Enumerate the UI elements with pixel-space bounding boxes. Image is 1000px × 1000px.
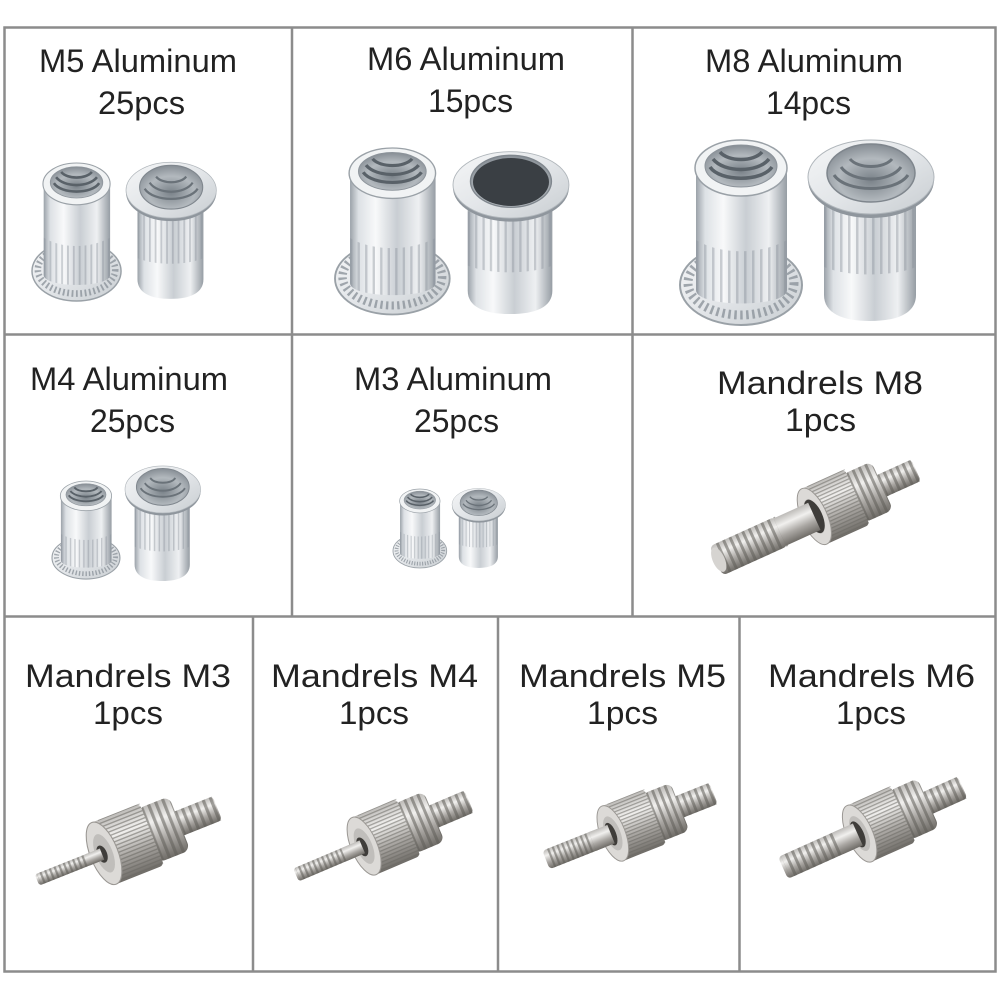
heading: M3 Aluminum 25pcs — [354, 361, 552, 439]
heading: M8 Aluminum 14pcs: M8 Aluminum — [705, 43, 903, 79]
icon: M5 mandrel — [535, 766, 724, 887]
heading: Mandrels M6 1pcs: Mandrels M6 — [768, 658, 975, 694]
heading: Mandrels M3 1pcs: Mandrels M3 — [25, 658, 231, 694]
icon: M8 rivet nuts — [680, 140, 934, 325]
heading: Mandrels M6 1pcs — [768, 658, 975, 731]
heading: Mandrels M8 1pcs: Mandrels M8 — [717, 365, 923, 401]
heading: M8 Aluminum 14pcs — [705, 43, 903, 121]
heading: M4 Aluminum 25pcs: M4 Aluminum — [30, 361, 228, 397]
panel: Mandrels M6 — [768, 658, 975, 896]
heading: Mandrels M3 1pcs — [25, 658, 231, 731]
heading: Mandrels M4 1pcs: Mandrels M4 — [271, 658, 478, 694]
heading: M8 Aluminum 14pcs: 14pcs — [766, 85, 851, 121]
heading: M3 Aluminum 25pcs: M3 Aluminum — [354, 361, 552, 397]
heading: M4 Aluminum 25pcs — [30, 361, 228, 439]
panel: Mandrels M8 — [701, 365, 929, 590]
heading: M6 Aluminum 15pcs: M6 Aluminum — [367, 41, 565, 77]
icon: M6 mandrel — [770, 759, 975, 896]
panel: M6 Aluminum — [335, 41, 569, 314]
panel: Mandrels M3 — [25, 658, 231, 911]
heading: M5 Aluminum 25pcs: M5 Aluminum — [39, 43, 237, 79]
heading: M6 Aluminum 15pcs — [367, 41, 565, 119]
heading: Mandrels M5 1pcs: 1pcs — [587, 695, 658, 731]
heading: M4 Aluminum 25pcs: 25pcs — [90, 403, 175, 439]
panel: M3 Aluminum — [354, 361, 552, 568]
icon: M4 rivet nuts — [52, 466, 201, 581]
heading: M5 Aluminum 25pcs — [39, 43, 237, 121]
panel: Mandrels M4 — [271, 658, 481, 904]
icon: M8 mandrel — [701, 443, 929, 590]
icon: M5 rivet nuts — [32, 162, 216, 301]
panel: M5 Aluminum — [32, 43, 237, 301]
panel: M4 Aluminum — [30, 361, 228, 581]
panel: Mandrels M5 — [519, 658, 726, 887]
heading: Mandrels M4 1pcs — [271, 658, 478, 731]
heading: Mandrels M5 1pcs: Mandrels M5 — [519, 658, 726, 694]
icon: M4 mandrel — [284, 773, 481, 904]
icon: M3 mandrel — [25, 777, 230, 911]
heading: Mandrels M4 1pcs: 1pcs — [339, 695, 409, 731]
heading: M5 Aluminum 25pcs: 25pcs — [98, 85, 185, 121]
heading: M3 Aluminum 25pcs: 25pcs — [414, 403, 499, 439]
heading: M6 Aluminum 15pcs: 15pcs — [428, 83, 513, 119]
heading: Mandrels M5 1pcs — [519, 658, 726, 731]
icon: M3 rivet nuts — [393, 488, 506, 568]
panel: M8 Aluminum — [680, 43, 934, 325]
heading: Mandrels M6 1pcs: 1pcs — [836, 695, 906, 731]
heading: Mandrels M3 1pcs: 1pcs — [93, 695, 163, 731]
heading: Mandrels M8 1pcs — [717, 365, 923, 438]
icon: M6 rivet nuts — [335, 148, 569, 314]
heading: Mandrels M8 1pcs: 1pcs — [785, 402, 856, 438]
